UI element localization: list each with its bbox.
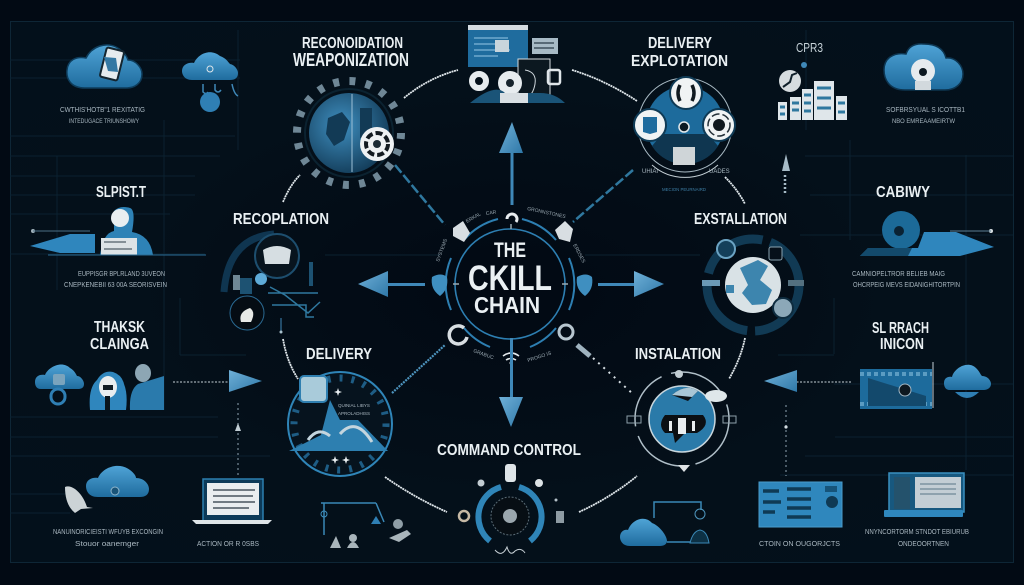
icon: cloud, persons and bird xyxy=(35,364,164,410)
ring labels: GRONNSTONES xyxy=(527,206,567,220)
icon: network and people xyxy=(321,503,411,548)
icon: laptop left xyxy=(192,479,272,524)
icon: exstallation globe xyxy=(702,239,804,331)
icon: operator with spear xyxy=(30,207,206,255)
icon: recoplation machinery xyxy=(224,234,320,334)
ring ticks xyxy=(453,224,568,344)
icon: globe with gear ring xyxy=(297,81,401,185)
text: top right caption: SOFBRSYUAL S ICOTTB1 xyxy=(886,105,965,114)
text: bottom left captions: NANUINORICIEISTI WFUYB EXCONGIN xyxy=(53,529,163,536)
heading: Thaksk Claingo xyxy=(90,319,149,353)
heading: Sl Rrach Inicon: SL RRACH xyxy=(872,320,929,337)
ring labels xyxy=(435,206,586,364)
heading: Delivery Explotation xyxy=(631,35,728,70)
icon: disc with spear xyxy=(860,211,994,256)
text: bottom left captions: Stouor oanemger xyxy=(75,541,140,548)
text: bottom left captions xyxy=(53,529,259,548)
ring labels: ERKAL xyxy=(465,211,482,225)
tool connectors xyxy=(392,165,633,394)
text: right middle caption xyxy=(852,271,960,289)
text: bottom right captions xyxy=(759,529,969,548)
caption: MECION PEURNAIRD xyxy=(662,187,707,192)
outer ring segments xyxy=(446,219,574,347)
heading: CPR3: CPR3 xyxy=(796,40,823,55)
text: bottom right captions: NNYNCORTORM STNDOT EBIURUB xyxy=(865,529,969,536)
icon: delivery mountain dial xyxy=(288,372,392,476)
icon: command control ring xyxy=(459,464,564,553)
text: bottom right captions: CTOIN ON OUGORJCTS xyxy=(759,541,840,548)
heading: Delivery Explotation: EXPLOTATION xyxy=(631,53,728,70)
ring labels: PROGO IS xyxy=(527,350,553,364)
ring labels: ERDSES xyxy=(571,243,586,265)
heading: Command and Control: COMMAND CONTROL xyxy=(437,442,581,459)
heading words xyxy=(468,239,552,318)
text: top right caption xyxy=(886,105,965,125)
icon: cloud with skull xyxy=(884,44,963,90)
icon: cloud with rat xyxy=(65,466,149,513)
icon: cloud with phone xyxy=(67,45,142,88)
icon: cloud with drips and disc xyxy=(182,52,238,112)
inner ring segments xyxy=(455,229,565,339)
text: left middle caption: CNEPKENEBII 63 00A SEORISVEIN xyxy=(64,282,167,289)
connecting arcs xyxy=(283,70,745,512)
ring icons xyxy=(432,214,592,364)
heading: Delivery lower: DELIVERY xyxy=(306,346,372,363)
heading: Exstallation: EXSTALLATION xyxy=(694,211,787,228)
icon: blue dashboard panel xyxy=(759,482,842,527)
text: top left caption xyxy=(60,105,145,125)
icon: laptop right xyxy=(884,473,964,517)
heading: Instalation: INSTALATION xyxy=(635,346,721,363)
icon: city buildings xyxy=(778,62,847,120)
icon: three-node exploit disc xyxy=(634,77,735,192)
heading: Slpist: SLPIST.T xyxy=(96,184,146,201)
heading words: CKILL xyxy=(468,259,552,298)
text: bottom left captions: ACTION OR R 0SBS xyxy=(197,541,259,548)
icon: monitor with gears xyxy=(468,25,565,103)
heading: Reconoidation Weaponization: RECONOIDATION xyxy=(302,35,403,52)
text: top left caption: CWTHIS'HOTB"1 REXITATIG xyxy=(60,105,145,114)
text: top left caption: INTEDUGACE TRIUNSHOWY xyxy=(69,119,139,125)
icon: cloud with network xyxy=(620,502,709,546)
icon: film strip and cloud xyxy=(860,362,991,409)
icon: three-node exploit disc: UHIAI xyxy=(642,169,658,175)
icon: delivery mountain dial: APROLADHISS xyxy=(338,411,370,416)
arrow: left xyxy=(358,271,425,297)
text: right middle caption: CAMNIOPELTROR BELIEB MAIG xyxy=(852,271,945,278)
ring labels: GRABUC xyxy=(472,348,495,361)
heading: Recoplation: RECOPLATION xyxy=(233,211,329,228)
ring labels: SYSTEMS xyxy=(435,238,449,263)
text: left middle caption: EUPPISGR BPLRLAND 3UVEON xyxy=(78,271,165,278)
heading: Cabiwy: CABIWY xyxy=(876,184,930,201)
icon: three-node exploit disc: UADES xyxy=(709,169,730,175)
heading: Reconoidation Weaponization xyxy=(293,35,409,70)
ring labels: CAR xyxy=(485,210,497,217)
arrow: down xyxy=(499,338,523,427)
heading: Thaksk Claingo: CLAINGA xyxy=(90,336,149,353)
text: left middle caption xyxy=(64,271,167,289)
text: top right caption: NBO EMREAAMEIRTW xyxy=(892,119,955,125)
heading: Delivery Explotation: DELIVERY xyxy=(648,35,712,52)
arrow: right xyxy=(598,271,664,297)
icon: small arrow right column xyxy=(782,154,790,195)
heading: Sl Rrach Inicon: INICON xyxy=(880,336,924,353)
text: right middle caption: OHCRPEIG MEVS EIDANIGHITORTPIN xyxy=(853,282,960,289)
title: The Kill Chain center xyxy=(432,206,592,364)
arrow: lower left xyxy=(173,370,262,392)
heading words: CHAIN xyxy=(474,292,540,318)
icon: small arrow lower right xyxy=(784,405,788,476)
heading words: THE xyxy=(494,239,526,262)
arrow: up xyxy=(499,122,523,205)
heading: Reconoidation Weaponization: WEAPONIZATION xyxy=(293,50,409,70)
icon: small arrow lower left xyxy=(235,403,241,476)
text: bottom right captions: ONDEOORTNEN xyxy=(898,541,949,548)
heading: Sl Rrach Inicon xyxy=(872,320,929,353)
arrow: lower right xyxy=(764,370,851,392)
icon: delivery mountain dial: QUINIAL LIBYS xyxy=(338,403,370,408)
icon: instalation globe xyxy=(627,370,736,472)
heading: Thaksk Claingo: THAKSK xyxy=(94,319,145,336)
